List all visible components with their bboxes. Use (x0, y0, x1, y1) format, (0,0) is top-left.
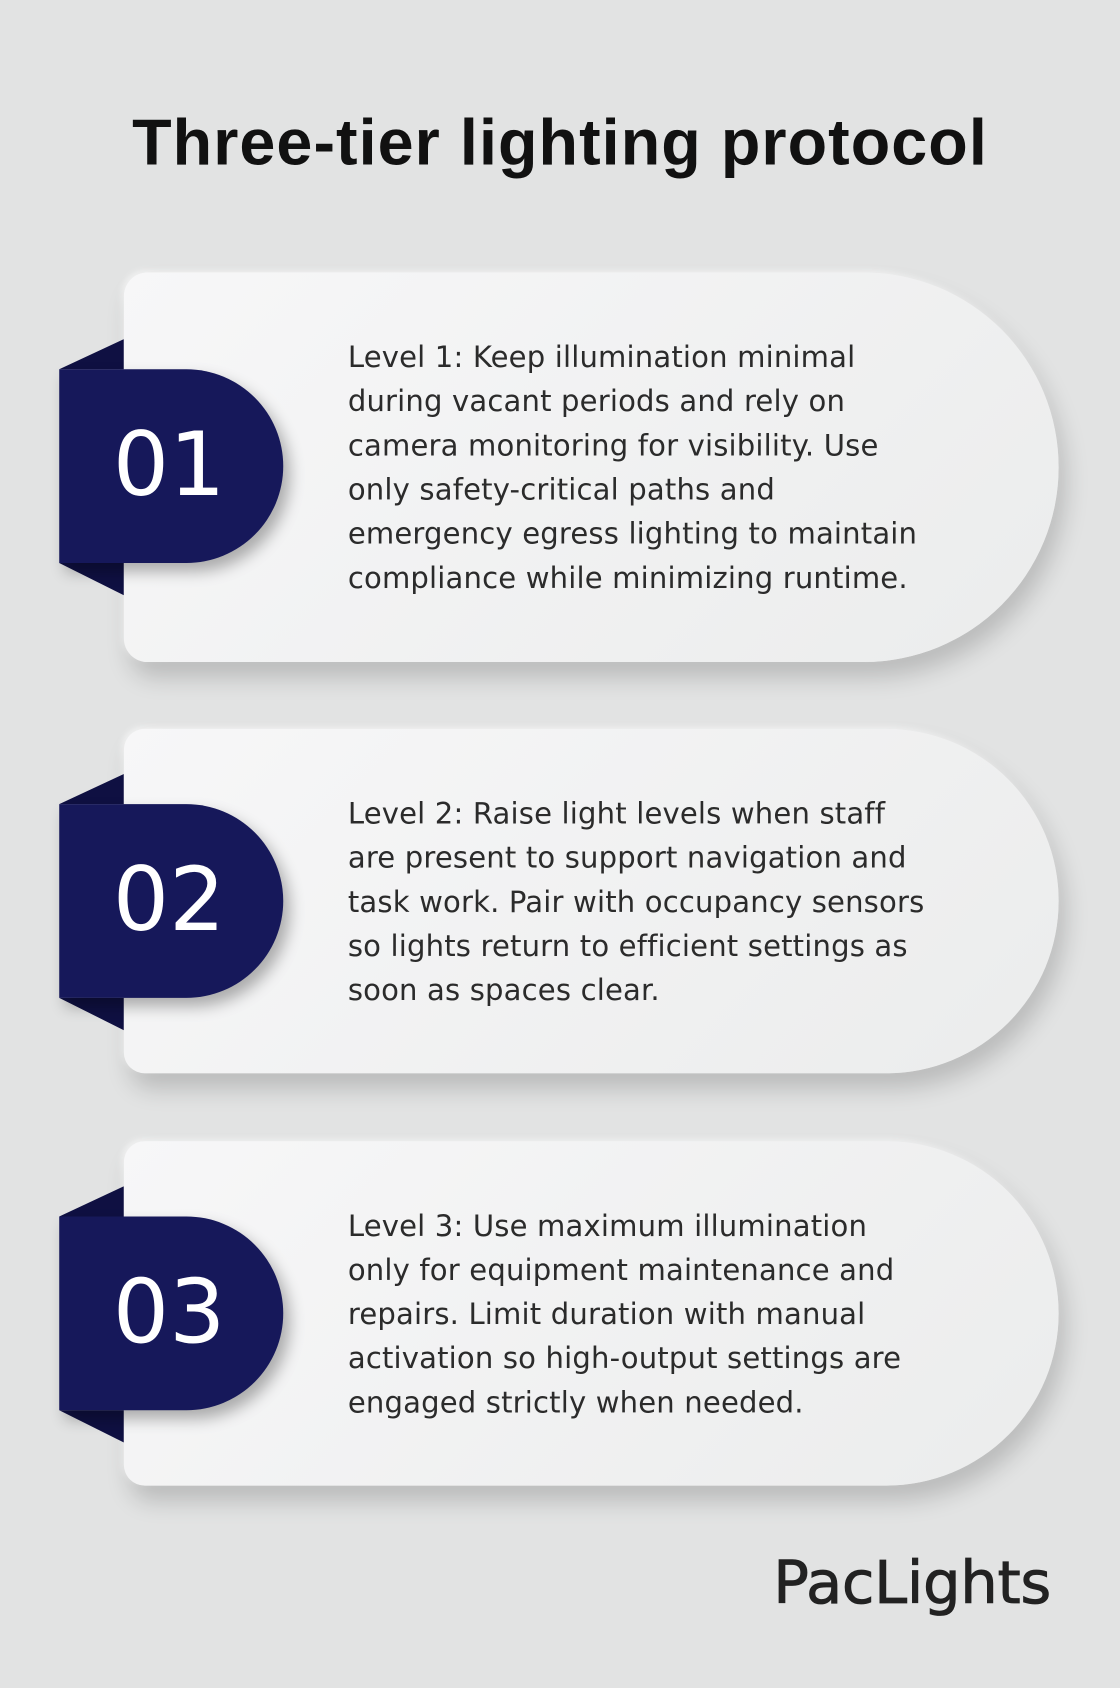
text: level 3 (348, 1210, 901, 1420)
logo: PacLights (773, 1548, 1051, 1617)
badge 01: 01 (113, 414, 225, 517)
text: level 2: soon as spaces clear. (348, 974, 660, 1008)
badge 01 (59, 369, 283, 563)
text: level 1: compliance while minimizing runtime. (348, 562, 908, 595)
text: level 1: camera monitoring for visibility. Use (348, 430, 879, 463)
text: level 3: only for equipment maintenance and (348, 1254, 894, 1287)
badge 02 (59, 804, 283, 998)
badge 03: 03 (113, 1262, 225, 1364)
badge 02: 02 (113, 849, 225, 952)
text: level 1: only safety-critical paths and (348, 474, 775, 507)
panel: level 3 (124, 1141, 1059, 1486)
text: level 3: repairs. Limit duration with manual (348, 1298, 865, 1332)
panel: level 2 (124, 729, 1059, 1073)
text: level 2: so lights return to efficient settings as (348, 930, 908, 963)
text: level 2: are present to support navigation and (348, 842, 907, 875)
text: level 3: activation so high-output settings are (348, 1342, 901, 1376)
text: level 1: Level 1: Keep illumination minimal (348, 341, 855, 375)
badge 03 (59, 1216, 283, 1410)
icon: badge fold 1 (60, 339, 124, 596)
text: level 3: Level 3: Use maximum illumination (348, 1210, 867, 1243)
text: level 1: during vacant periods and rely on (348, 385, 845, 419)
panel: level 1 (124, 272, 1059, 662)
text: level 1 (348, 341, 917, 595)
icon: badge fold 3 (60, 1186, 124, 1442)
title: Three-tier lighting protocol (132, 107, 988, 179)
icon: badge fold 2 (60, 774, 124, 1030)
text: level 3: engaged strictly when needed. (348, 1387, 804, 1420)
text: level 2 (348, 798, 924, 1008)
text: level 1: emergency egress lighting to maintain (348, 518, 917, 551)
text: level 2: Level 2: Raise light levels when staff (348, 798, 885, 831)
text: level 2: task work. Pair with occupancy sensors (348, 886, 924, 919)
